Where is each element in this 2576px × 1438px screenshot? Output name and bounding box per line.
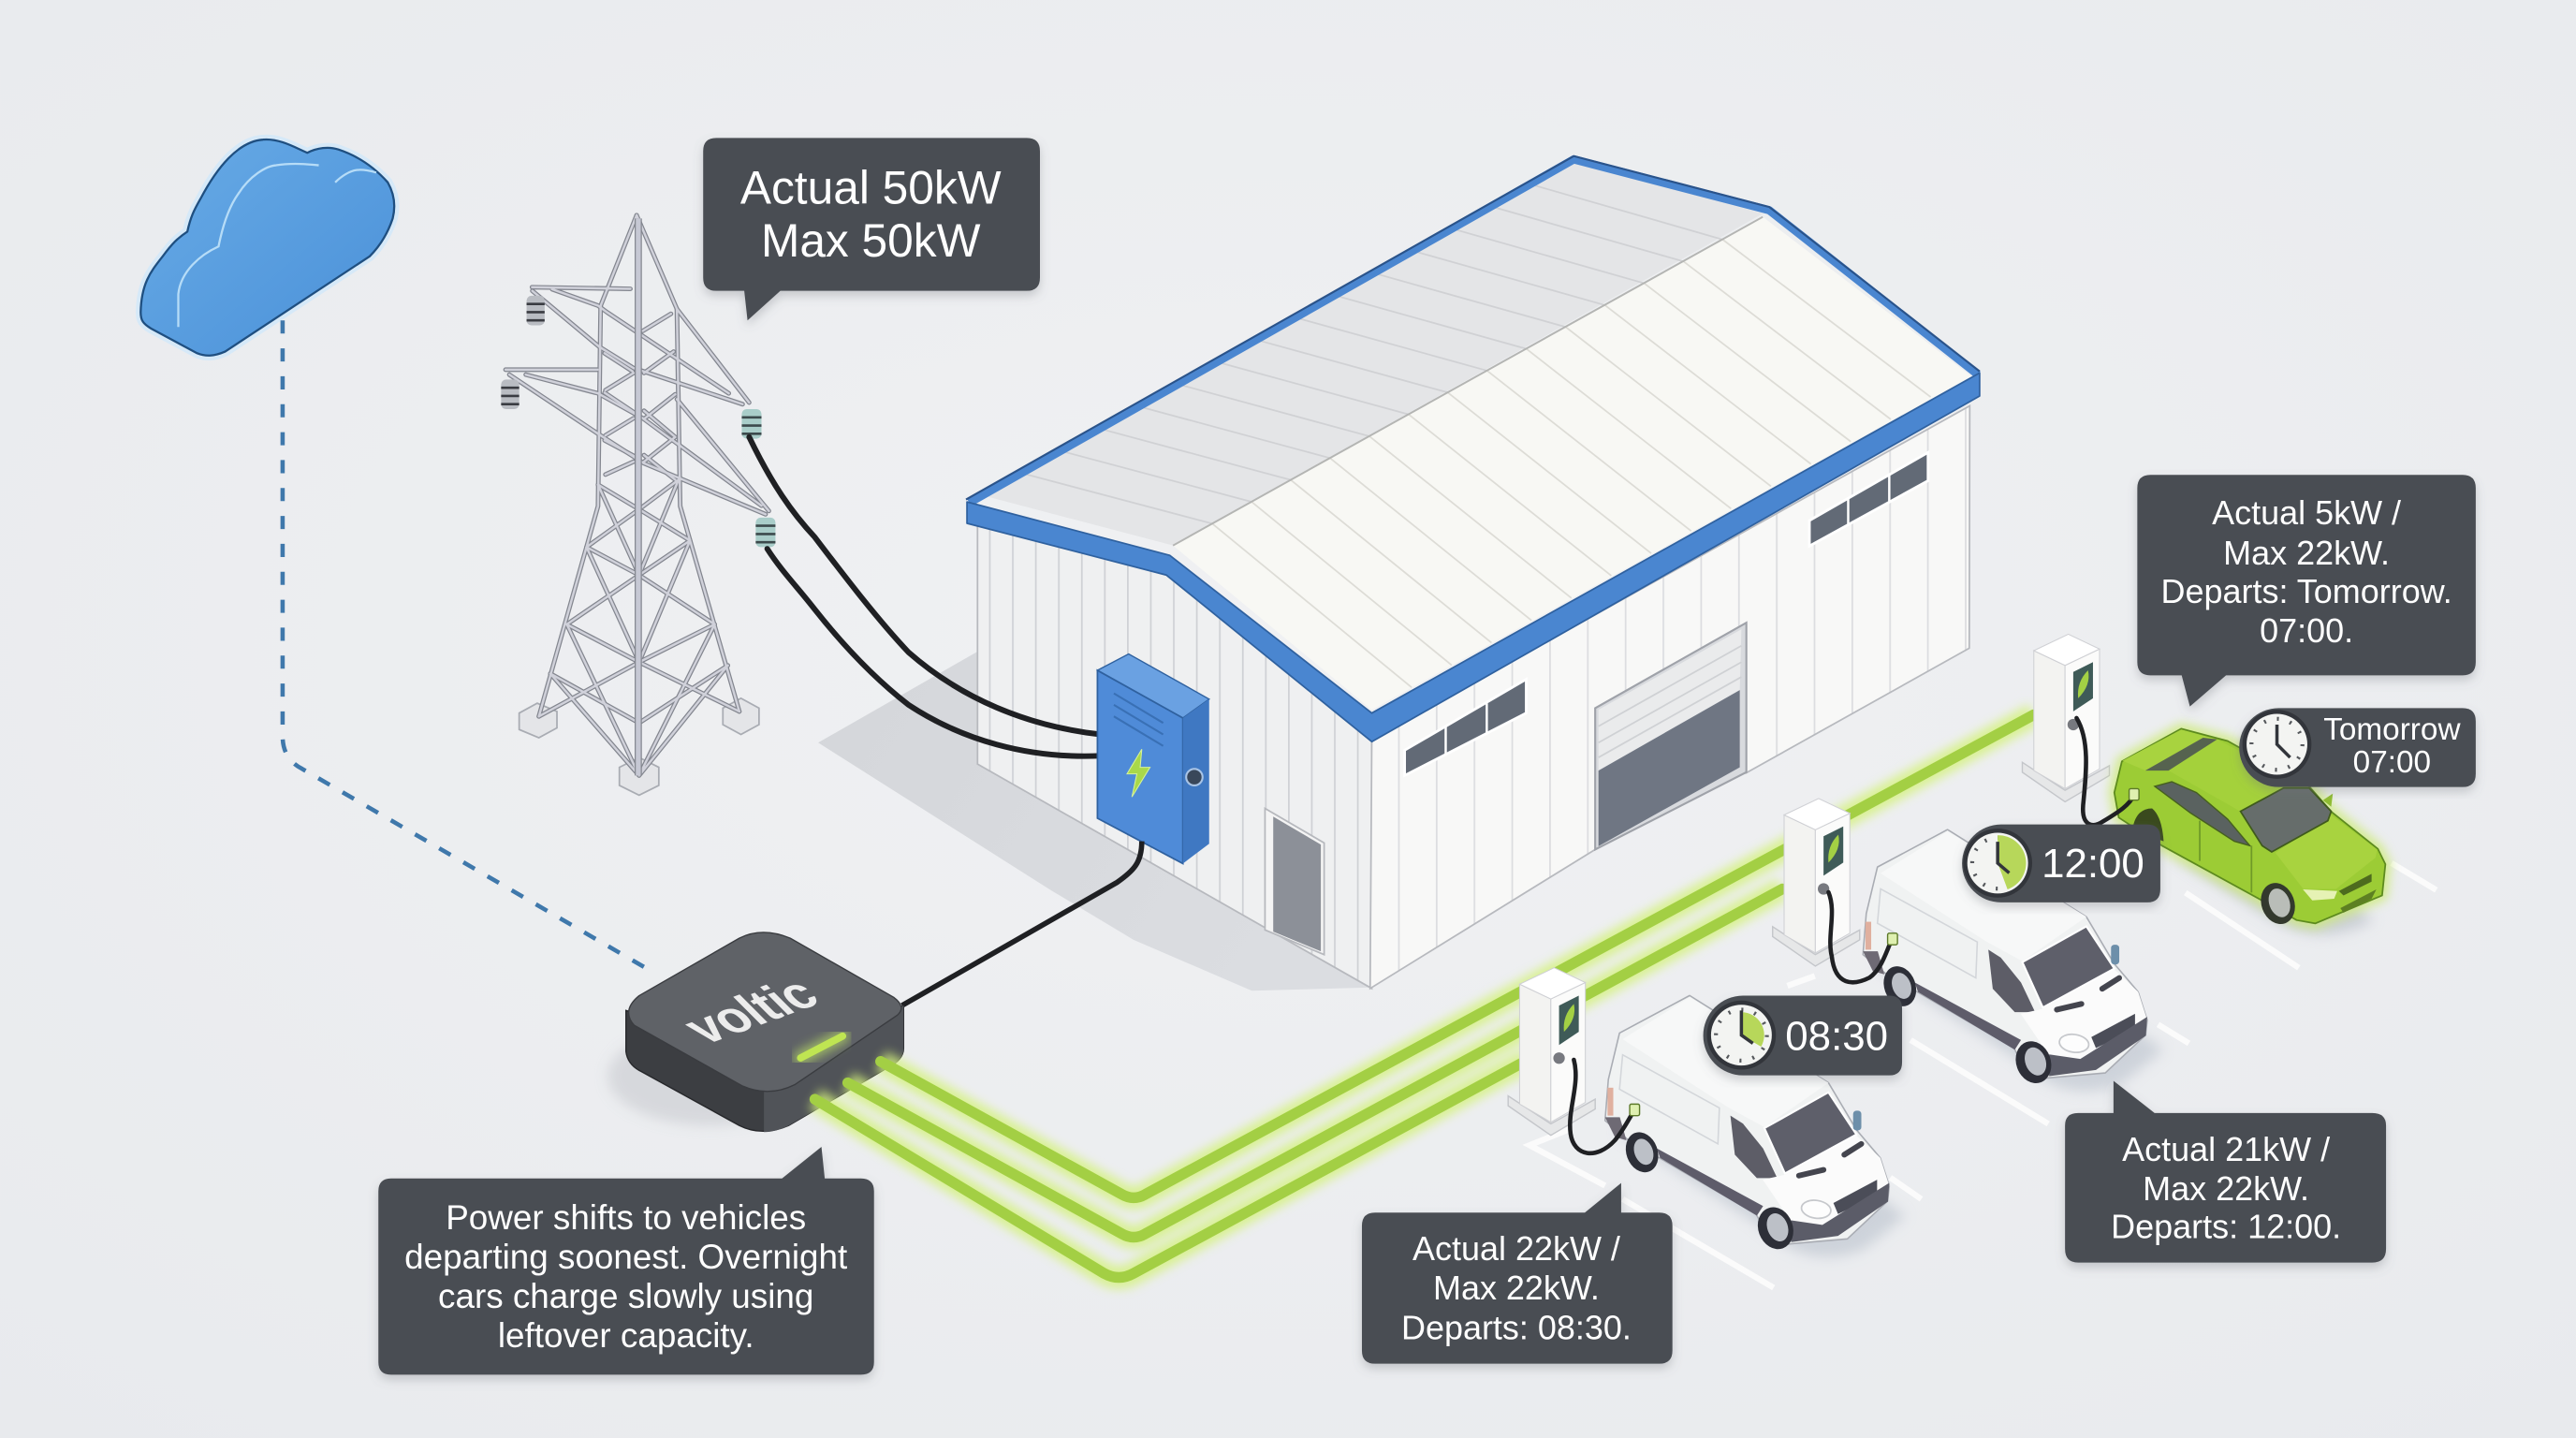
callout: tomorrow car: Actual 5kW / [2212,493,2401,532]
icon: cloud [140,139,394,356]
callout: van 2 [2065,1080,2386,1263]
roof: back plane [986,161,1763,546]
green power lines: glow [815,714,2034,1278]
callout: van 2: Actual 21kW / [2122,1130,2330,1168]
icon: clock [1707,1001,1776,1070]
charging station 1 [1508,968,1595,1136]
insulators [501,296,775,547]
departure tag: tomorrow 07:00 [2239,708,2476,787]
controller hub: voltic [607,932,903,1132]
status LED [800,1036,842,1058]
callout: power shifting explanation [378,1147,874,1374]
callout: van 2: Max 22kW. [2143,1169,2309,1208]
cable: box to controller [902,842,1142,1005]
wall: long side [1370,405,1969,989]
callout: grid power: Actual 50kW [740,162,1002,214]
window left [1405,680,1526,775]
departure tag: tomorrow 07:00: Tomorrow [2323,712,2461,747]
icon: lightning bolt [1127,749,1150,797]
warehouse building [966,156,1980,989]
roof trim: blue edge [966,156,1980,741]
callout: van 1: Departs: 08:30. [1401,1308,1632,1346]
charging cables [1570,718,2134,1153]
icon: clock [1963,829,2032,898]
icon: clock [2243,710,2311,779]
van 1 [1605,995,1906,1257]
garage door [1595,623,1747,849]
green power lines [815,714,2034,1278]
wall: gable side [977,522,1372,989]
callout: tomorrow car: Max 22kW. [2223,534,2390,572]
callout: van 1: Actual 22kW / [1412,1229,1620,1268]
window right [1809,452,1928,546]
transmission tower [501,215,775,795]
callout: grid power: Max 50kW [761,214,981,267]
callout: grid power [703,138,1040,320]
parking bay lines [1530,863,2437,1287]
callout: van 1: Max 22kW. [1433,1269,1600,1307]
van 2 [1863,829,2163,1091]
departure tag: 08:30: 08:30 [1785,1013,1888,1059]
callout: power shifting explanation: Power shifts to vehicles [446,1198,806,1237]
building shadow [818,651,1370,990]
callout: tomorrow car: Departs: Tomorrow. [2161,572,2452,610]
logo text: voltic [670,968,831,1053]
callout: power shifting explanation: departing soonest. Overnight [404,1238,847,1276]
callout: tomorrow car [2137,475,2476,707]
callout: power shifting explanation: cars charge slowly using [438,1277,813,1315]
power cables: tower to distribution box [749,437,1101,756]
roof: front plane [1173,217,1971,710]
tower feet [520,698,759,795]
side door [1265,808,1325,955]
callout: power shifting explanation: leftover capacity. [498,1316,754,1355]
dashed connection: cloud to controller [283,320,654,973]
departure tag: 12:00: 12:00 [2042,841,2144,887]
callout: tomorrow car: 07:00. [2260,611,2353,650]
charging station 3 [2022,634,2110,801]
green car [2115,728,2385,934]
distribution box [1097,654,1209,863]
departure tag: 12:00 [1962,825,2160,902]
charging station 2 [1773,799,1860,966]
callout: van 2: Departs: 12:00. [2111,1207,2341,1245]
departure tag: tomorrow 07:00: 07:00 [2353,745,2431,780]
callout: van 1 [1362,1183,1673,1364]
departure tag: 08:30 [1704,996,1902,1076]
charging plugs [1630,788,2139,1116]
